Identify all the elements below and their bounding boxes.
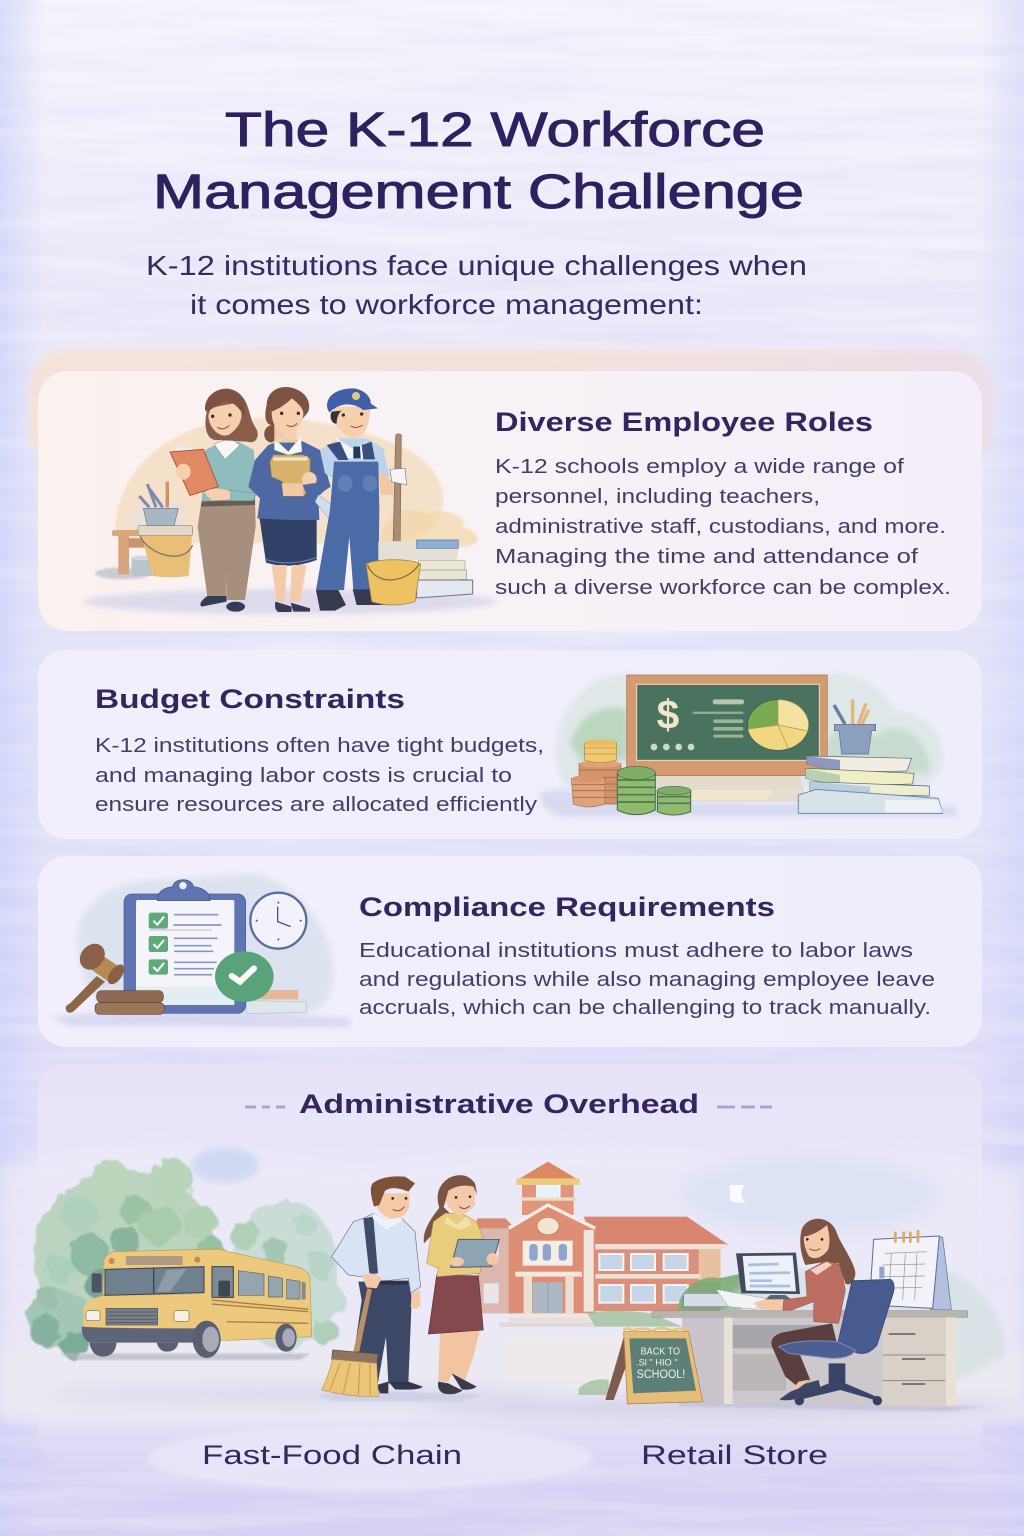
title: Management Challenge xyxy=(153,166,804,219)
body text: diverse employee roles: personnel, including teachers, xyxy=(495,486,820,508)
panel: administrative overhead xyxy=(0,1064,1024,1490)
body text: budget constraints: and managing labor costs is crucial to xyxy=(95,765,512,787)
pencil cup and book pile xyxy=(798,699,943,813)
desk xyxy=(652,1311,968,1406)
stacked books xyxy=(378,540,473,598)
woman with folder xyxy=(248,387,331,612)
body text: compliance requirements: and regulations while also managing employee leave xyxy=(359,969,935,991)
title xyxy=(153,104,804,219)
chalkboard sign: .Sl " HIO " xyxy=(636,1358,678,1368)
books under clipboard xyxy=(250,990,298,999)
moon and sky marks xyxy=(729,1185,746,1203)
body text: diverse employee roles: administrative staff, custodians, and more. xyxy=(495,516,946,538)
label: retail store: Retail Store xyxy=(641,1440,828,1470)
school bus xyxy=(60,1249,312,1360)
illustration: budget chalkboard, coins and books xyxy=(540,673,957,817)
coin stacks xyxy=(571,739,691,815)
man with broom xyxy=(317,1176,483,1402)
worker and chair xyxy=(754,1219,894,1405)
heading: diverse employee roles: Diverse Employee Roles xyxy=(495,407,873,437)
caption pill xyxy=(148,1426,592,1490)
body text: budget constraints: ensure resources are allocated efficiently xyxy=(95,794,537,816)
body text: budget constraints: K-12 institutions often have tight budgets, xyxy=(95,735,544,757)
woman with clipboard xyxy=(170,389,258,612)
school building xyxy=(477,1162,742,1380)
body text: compliance requirements: Educational institutions must adhere to labor laws xyxy=(359,940,913,962)
woman with tablet xyxy=(424,1175,499,1394)
panel: budget constraints xyxy=(38,650,982,839)
title: The K-12 Workforce xyxy=(225,104,765,157)
monitor xyxy=(684,1253,800,1309)
chalkboard sign xyxy=(605,1328,703,1404)
body text: diverse employee roles: K-12 schools employ a wide range of xyxy=(495,456,905,478)
panel: diverse employee roles xyxy=(28,349,993,631)
chalkboard xyxy=(627,675,827,776)
custodian with mop and bucket xyxy=(315,388,407,611)
panel: compliance requirements xyxy=(38,856,982,1047)
check badge xyxy=(215,951,274,1002)
body text: budget constraints xyxy=(95,735,544,816)
heading: budget constraints: Budget Constraints xyxy=(95,684,405,714)
heading: compliance requirements: Compliance Requirements xyxy=(359,892,775,922)
chalkboard sign: SCHOOL! xyxy=(637,1367,685,1381)
table and bucket xyxy=(112,482,193,577)
body text: diverse employee roles xyxy=(495,456,951,599)
office scene: sign, desk and worker xyxy=(579,1185,1006,1412)
body text: diverse employee roles: such a diverse workforce can be complex. xyxy=(495,577,951,599)
gavel xyxy=(66,939,164,1014)
illustration: school staff xyxy=(83,387,497,614)
body text: compliance requirements xyxy=(359,940,935,1019)
heading: administrative overhead: Administrative Overhead xyxy=(299,1089,699,1119)
scene backdrop xyxy=(0,1147,1024,1420)
trees xyxy=(26,1160,345,1359)
illustration: compliance clipboard, gavel and clock xyxy=(50,873,350,1027)
clipboard checklist xyxy=(124,880,246,1013)
intro text: K-12 institutions face unique challenges when xyxy=(146,250,807,281)
chalkboard sign: BACK TO xyxy=(641,1346,680,1357)
intro text: it comes to workforce management: xyxy=(190,289,703,320)
pie chart xyxy=(747,700,809,750)
calendar xyxy=(869,1230,951,1309)
body text: diverse employee roles: Managing the time and attendance of xyxy=(495,546,919,568)
clock xyxy=(250,893,306,949)
body text: compliance requirements: accruals, which can be challenging to track manually. xyxy=(359,997,931,1019)
chalkboard: $ xyxy=(657,691,680,737)
intro text xyxy=(146,250,807,320)
label: fast-food chain: Fast-Food Chain xyxy=(202,1440,462,1470)
